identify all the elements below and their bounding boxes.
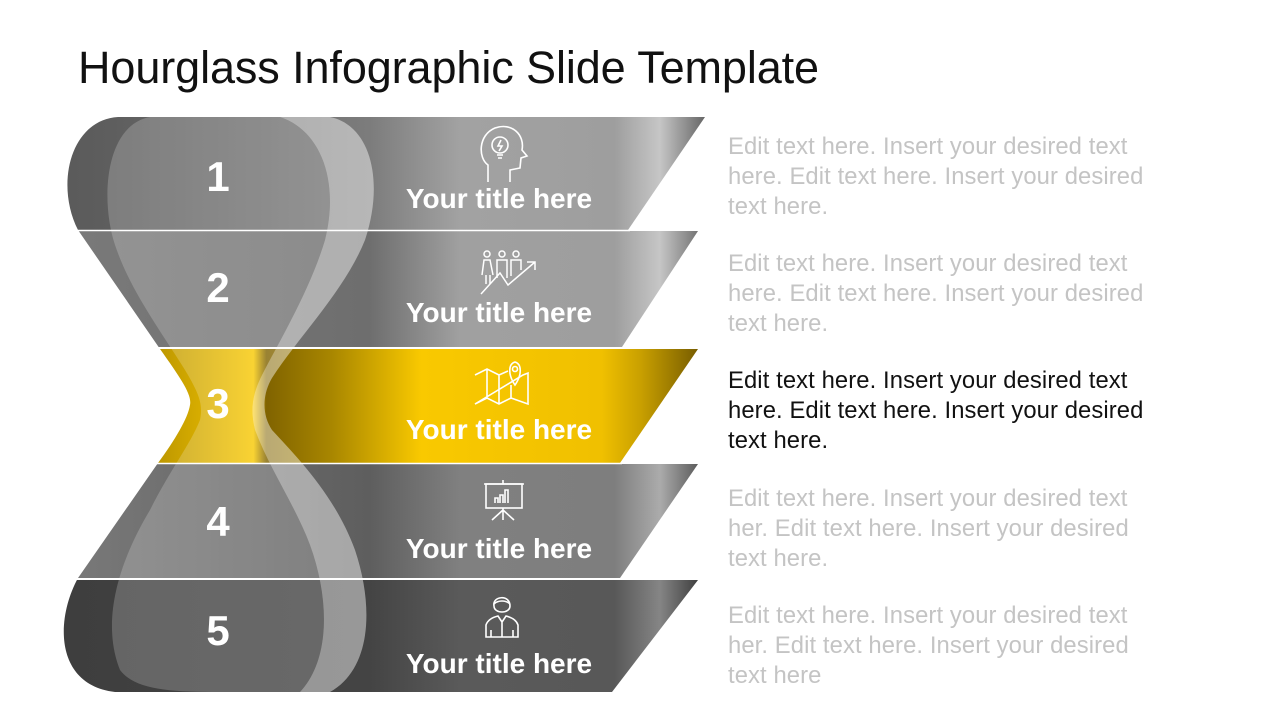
text block 1: text here. bbox=[728, 193, 828, 220]
text block 2 bbox=[728, 250, 1143, 337]
band 1 bbox=[0, 117, 705, 230]
numbers: 2 bbox=[206, 264, 230, 311]
text block 2: text here. bbox=[728, 310, 828, 337]
band titles: Your title here bbox=[406, 414, 592, 445]
text block 1 bbox=[728, 133, 1143, 220]
numbers: 3 bbox=[206, 380, 230, 427]
text block 5: her. Edit text here. Insert your desired bbox=[728, 632, 1129, 659]
icon: presentation board bbox=[484, 480, 524, 520]
icon: team growth bbox=[481, 251, 535, 294]
text block 4: text here. bbox=[728, 545, 828, 572]
icon: businessman bbox=[486, 598, 518, 637]
separators bbox=[75, 230, 630, 579]
hourglass diagram bbox=[64, 117, 705, 692]
text block 1: Edit text here. Insert your desired text bbox=[728, 133, 1127, 160]
band 3 bbox=[158, 349, 698, 463]
band titles: Your title here bbox=[406, 183, 592, 214]
band 2 bbox=[78, 231, 698, 347]
text block 4: Edit text here. Insert your desired text bbox=[728, 485, 1127, 512]
text block 4 bbox=[728, 485, 1129, 572]
numbers bbox=[206, 153, 230, 654]
text block 5: Edit text here. Insert your desired text bbox=[728, 602, 1127, 629]
text block 5: text here bbox=[728, 662, 822, 689]
numbers: 4 bbox=[206, 498, 230, 545]
icon: map pin bbox=[475, 362, 528, 404]
band titles bbox=[406, 183, 592, 679]
text block 2: Edit text here. Insert your desired text bbox=[728, 250, 1127, 277]
text block 3: text here. bbox=[728, 427, 828, 454]
light strip bbox=[252, 117, 374, 692]
icon: head with bulb bbox=[481, 127, 527, 182]
band titles: Your title here bbox=[406, 533, 592, 564]
band titles: Your title here bbox=[406, 297, 592, 328]
band 4 bbox=[78, 464, 698, 578]
text block 1: here. Edit text here. Insert your desired bbox=[728, 163, 1143, 190]
text block 3: Edit text here. Insert your desired text bbox=[728, 367, 1127, 394]
text block 3 bbox=[728, 367, 1143, 454]
text block 5 bbox=[728, 602, 1129, 689]
band titles: Your title here bbox=[406, 648, 592, 679]
numbers: 5 bbox=[206, 607, 230, 654]
title: Hourglass Infographic Slide Template bbox=[78, 42, 819, 93]
text block 2: here. Edit text here. Insert your desired bbox=[728, 280, 1143, 307]
text block 4: her. Edit text here. Insert your desired bbox=[728, 515, 1129, 542]
glass front bbox=[107, 117, 374, 692]
text block 3: here. Edit text here. Insert your desired bbox=[728, 397, 1143, 424]
numbers: 1 bbox=[206, 153, 230, 200]
band 5 bbox=[0, 580, 698, 692]
